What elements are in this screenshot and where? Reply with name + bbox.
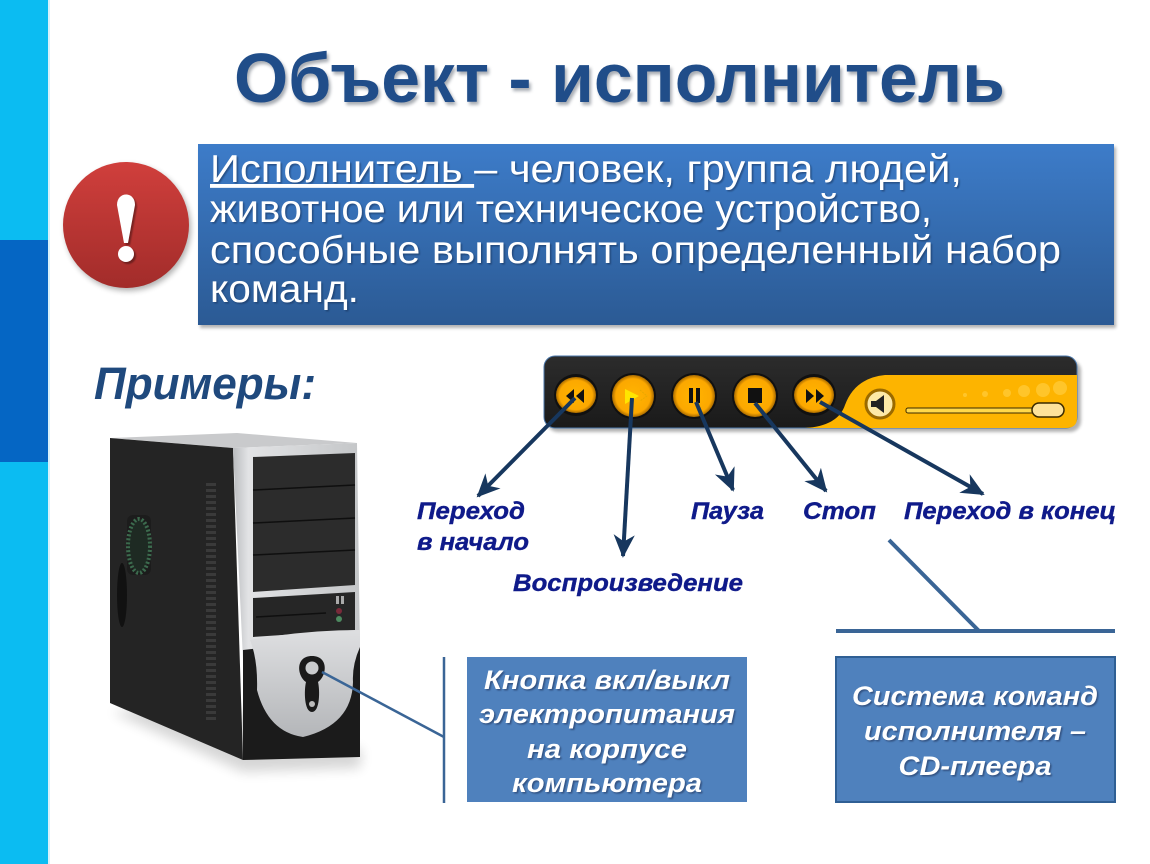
lower drive bay: [253, 592, 355, 637]
side fan grille: [127, 515, 151, 575]
floor shadow: [112, 700, 362, 772]
top of case: [111, 433, 357, 448]
definition text: команд.: [212, 270, 360, 312]
front ports: [336, 596, 344, 622]
volume dots: [963, 381, 1067, 397]
side panel: [110, 438, 243, 760]
definition text: команд.: [210, 268, 359, 311]
computer tower: [110, 433, 362, 772]
speaker icon: [866, 390, 894, 418]
callout: command system: исполнителя –: [864, 716, 1086, 746]
definition panel: [198, 144, 1116, 328]
labels for player buttons: [417, 498, 1116, 597]
CD player control bar: [544, 356, 1081, 432]
callout: command system: CD-плеера: [900, 752, 1053, 782]
callout: command system: Система команд: [852, 681, 1098, 711]
title: Объект - исполнитель: [234, 39, 1005, 117]
rewind button: [554, 374, 598, 416]
bracket line to command system: [836, 540, 1115, 631]
callout: power button: Кнопка вкл/выкл: [484, 665, 731, 695]
labels for player buttons: Пауза: [691, 498, 764, 525]
labels for player buttons: Воспроизведение: [513, 570, 743, 597]
connector line: power button: [322, 657, 444, 803]
heading: examples: Примеры:: [94, 358, 316, 409]
callout: command system: [836, 657, 1115, 802]
callout: command system: CD-плеера: [898, 751, 1052, 781]
callout: power button: на корпусе: [527, 734, 687, 764]
definition text: Исполнитель – человек, группа людей,: [212, 150, 963, 192]
callout: power button: электропитания: [480, 700, 737, 730]
arrow: to end: [820, 402, 983, 494]
left sidebar stripe: [0, 0, 50, 864]
icon: red exclamation circle: [63, 162, 191, 291]
callout: power button: на корпусе: [528, 736, 688, 766]
lower black case: [243, 636, 360, 760]
labels for player buttons: Переход в конец: [904, 498, 1116, 525]
volume yellow area: [805, 375, 1077, 428]
arrows from player buttons to labels: [478, 398, 983, 556]
callout: command system: Система команд: [854, 682, 1100, 712]
power button: [299, 656, 325, 712]
callout: power button: компьютера: [512, 768, 702, 798]
arrow: to start: [478, 398, 575, 496]
arrow: stop: [755, 403, 826, 491]
definition text: способные выполнять определенный набор: [212, 230, 1062, 274]
forward button: [792, 374, 836, 416]
labels for player buttons: в начало: [417, 529, 529, 556]
callout: power button: [467, 657, 747, 802]
definition text: способные выполнять определенный набор: [210, 229, 1061, 272]
upper drive bays: [253, 453, 355, 592]
definition text: животное или техническое устройство,: [210, 188, 932, 231]
callout: power button: компьютера: [514, 770, 704, 800]
definition text: животное или техническое устройство,: [212, 190, 934, 232]
side handle: [117, 563, 127, 627]
definition text: Исполнитель – человек, группа людей,: [210, 148, 962, 191]
arrow: play: [623, 398, 632, 556]
silver front bezel: [233, 443, 360, 660]
pause button: [671, 373, 717, 419]
arrow: pause: [696, 402, 733, 490]
callout: command system: исполнителя –: [866, 718, 1088, 748]
callout: power button: электропитания: [479, 699, 735, 729]
side vents: [206, 483, 216, 720]
labels for player buttons: Стоп: [803, 498, 876, 525]
labels for player buttons: Переход: [417, 498, 525, 525]
volume slider: [906, 403, 1064, 417]
silver front curve: [250, 630, 360, 737]
definition text: [210, 148, 1062, 312]
title: Объект - исполнитель: [236, 42, 1007, 120]
play button: [610, 373, 656, 419]
callout: power button: Кнопка вкл/выкл: [486, 666, 732, 696]
stop button: [732, 373, 778, 419]
